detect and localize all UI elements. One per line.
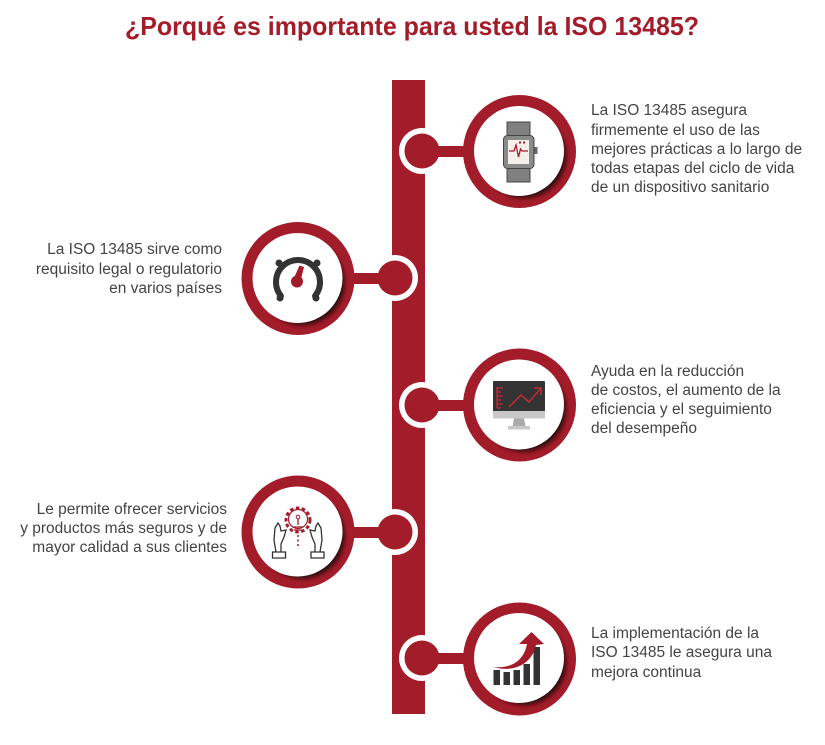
text: node 3: del desempeño <box>591 420 697 437</box>
timeline vertical bar <box>392 80 425 714</box>
icon: smartwatch <box>504 122 538 182</box>
text: node 5 <box>591 625 772 681</box>
node 5: growth chart <box>399 602 576 716</box>
node 4: hands and lightbulb gear <box>242 476 418 588</box>
icon: hands and lightbulb gear <box>272 508 324 558</box>
text: node 3: de costos, el aumento de la <box>591 382 781 399</box>
text: node 1: todas etapas del ciclo de vida <box>591 160 795 177</box>
text: node 1: mejores prácticas a lo largo de <box>591 141 802 158</box>
text: node 5: mejora continua <box>591 664 702 681</box>
icon: growth bars and arrow <box>493 632 544 685</box>
text: node 1: firmemente el uso de las <box>591 122 760 139</box>
text: node 2 <box>36 241 222 297</box>
node 3: monitor <box>399 348 576 462</box>
title: ¿Porqué es importante para usted la ISO 13485? <box>125 11 699 41</box>
text: node 4 <box>20 501 227 556</box>
node 2: gauge <box>242 222 418 335</box>
text: node 2: La ISO 13485 sirve como <box>47 241 222 258</box>
text: node 3: eficiencia y el seguimiento <box>591 401 772 418</box>
text: node 4: Le permite ofrecer servicios <box>37 501 227 518</box>
text: node 1: La ISO 13485 asegura <box>591 102 747 119</box>
text: node 3: Ayuda en la reducción <box>591 363 744 380</box>
text: node 2: requisito legal o regulatorio <box>36 261 222 278</box>
text: node 3 <box>591 363 781 437</box>
text: node 1 <box>591 102 802 196</box>
icon: monitor with trend <box>493 381 545 430</box>
text: node 4: y productos más seguros y de <box>20 520 227 537</box>
text: node 1: de un dispositivo sanitario <box>591 179 769 196</box>
icon: gauge <box>276 260 320 302</box>
text: node 5: ISO 13485 le asegura una <box>591 644 772 661</box>
text: node 2: en varios países <box>109 280 222 297</box>
text: node 4: mayor calidad a sus clientes <box>32 539 227 556</box>
text: node 5: La implementación de la <box>591 625 759 642</box>
node 1: smartwatch <box>399 95 576 208</box>
